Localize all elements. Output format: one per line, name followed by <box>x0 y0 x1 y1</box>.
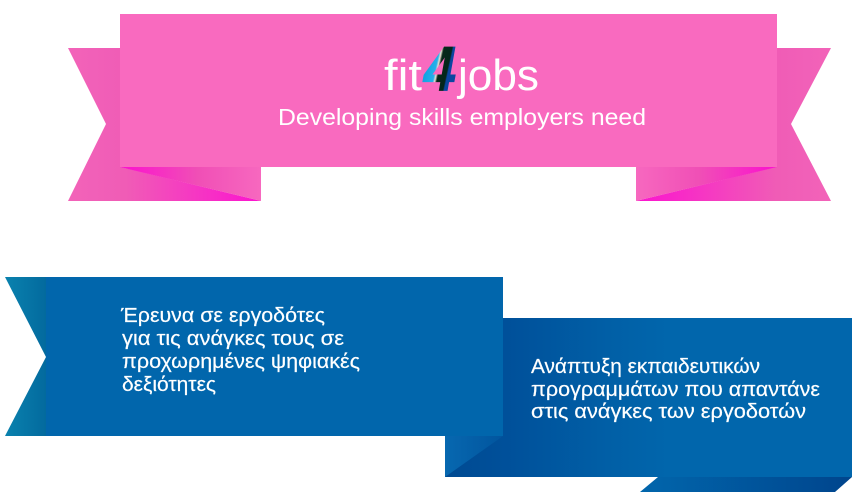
subtitle: Developing skills employers need <box>278 104 646 130</box>
blue panel <box>46 277 503 436</box>
text: employer survey: για τις ανάγκες τους σε <box>122 328 344 350</box>
pink ribbon banner <box>68 14 831 201</box>
ribbon lower fold <box>640 477 852 492</box>
left ribbon tail <box>68 48 261 201</box>
blue panel <box>445 318 852 477</box>
panel: employer survey <box>5 277 503 436</box>
logo: fit4jobs <box>384 35 539 104</box>
text: employer survey <box>120 305 360 396</box>
right ribbon tail <box>636 48 831 201</box>
corner fold <box>445 436 503 477</box>
logo: fit4jobs: 4 <box>422 35 456 104</box>
ribbon notch tail <box>5 277 47 436</box>
logo: fit4jobs: jobs <box>456 51 539 100</box>
text: programme development: Ανάπτυξη εκπαιδευτικών <box>531 356 760 378</box>
text: programme development <box>531 356 820 423</box>
main ribbon panel <box>120 14 777 167</box>
logo: fit4jobs: fit <box>384 51 422 100</box>
text: programme development: στις ανάγκες των εργοδοτών <box>531 401 806 423</box>
text: employer survey: προχωρημένες ψηφιακές <box>122 351 360 373</box>
text: employer survey: Έρευνα σε εργοδότες <box>120 305 325 327</box>
panel: employer programmes <box>445 318 852 492</box>
text: employer survey: δεξιότητες <box>122 374 216 396</box>
text: programme development: προγραμμάτων που απαντάνε <box>531 379 820 401</box>
